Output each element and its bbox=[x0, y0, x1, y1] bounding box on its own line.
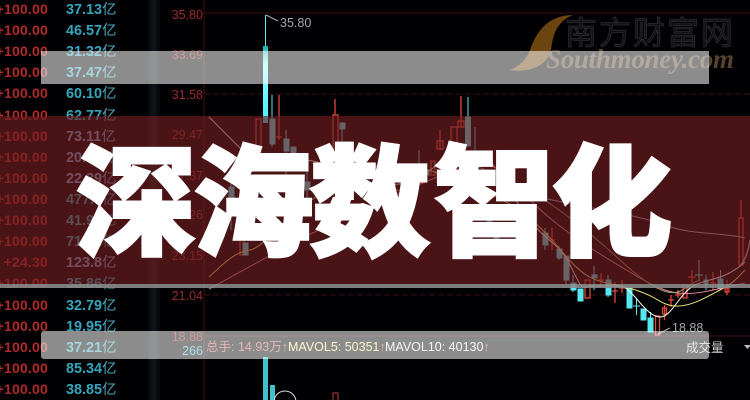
price change column bbox=[0, 1, 48, 397]
price axis labels: 27.37 bbox=[172, 169, 203, 183]
turnover column: 37.21亿 bbox=[66, 339, 116, 356]
watermark logo bbox=[510, 8, 734, 74]
price axis labels: 31.58 bbox=[172, 88, 203, 102]
watermark domain: Southmoney.com bbox=[546, 44, 734, 74]
turnover column: 37.13亿 bbox=[66, 1, 116, 18]
high and low price callouts bbox=[266, 15, 703, 335]
turnover column: 38.85亿 bbox=[66, 381, 116, 398]
turnover column: 32.79亿 bbox=[66, 297, 116, 314]
grey bottom bar bbox=[41, 331, 709, 359]
price axis labels: 35.80 bbox=[172, 8, 203, 22]
watermark chinese name: 南方财富网 bbox=[565, 8, 733, 54]
volume legend: MAVOL5: 50351↑ bbox=[288, 340, 386, 354]
turnover column: 22.39亿 bbox=[66, 170, 116, 187]
turnover column: 19.95亿 bbox=[66, 318, 116, 335]
grey top bar bbox=[41, 51, 709, 84]
turnover column: 71.72亿 bbox=[66, 233, 116, 250]
red title band bbox=[0, 116, 750, 284]
price axis labels: 25.26 bbox=[172, 208, 203, 222]
price axis labels: 21.04 bbox=[172, 289, 203, 303]
price axis labels: 33.69 bbox=[172, 48, 203, 62]
candlestick chart bbox=[172, 0, 750, 400]
red candles bbox=[240, 95, 743, 335]
high and low price callouts: 35.80 bbox=[280, 16, 311, 30]
turnover column: 60.10亿 bbox=[66, 85, 116, 102]
price axis labels bbox=[172, 8, 203, 358]
stock list background bbox=[0, 0, 160, 400]
price axis labels: 23.15 bbox=[172, 249, 203, 263]
turnover column: 37.47亿 bbox=[66, 64, 116, 81]
volume legend: 成交量 bbox=[686, 340, 724, 355]
price axis labels: 18.88 bbox=[172, 330, 203, 344]
turnover column: 73.11亿 bbox=[66, 128, 116, 145]
turnover column: 35.86亿 bbox=[66, 275, 116, 292]
cyan candles bbox=[214, 15, 723, 332]
price axis labels: 266 bbox=[182, 344, 203, 358]
turnover column: 62.77亿 bbox=[66, 107, 116, 124]
turnover column: 123.8亿 bbox=[66, 254, 116, 271]
volume legend bbox=[206, 340, 750, 355]
turnover column: 85.34亿 bbox=[66, 360, 116, 377]
turnover column: 31.32亿 bbox=[66, 43, 116, 60]
logo swoosh bbox=[510, 15, 573, 71]
price axis labels: 29.47 bbox=[172, 128, 203, 142]
turnover column: 20.87亿 bbox=[66, 149, 116, 166]
high and low price callouts: 18.88 bbox=[672, 321, 703, 335]
title: 深海数智化 bbox=[76, 107, 672, 281]
volume legend: 总手: 14.93万↑ bbox=[206, 340, 288, 354]
moving average lines bbox=[209, 117, 750, 317]
price change column: +24.30 bbox=[4, 254, 48, 270]
turnover column: 477.6亿 bbox=[66, 191, 116, 208]
turnover column bbox=[66, 1, 116, 398]
volume legend: MAVOL10: 40130↑ bbox=[385, 340, 490, 354]
grey band under title bbox=[0, 284, 750, 288]
turnover column: 41.93亿 bbox=[66, 212, 116, 229]
volume bars bbox=[263, 357, 338, 400]
turnover column: 46.57亿 bbox=[66, 22, 116, 39]
